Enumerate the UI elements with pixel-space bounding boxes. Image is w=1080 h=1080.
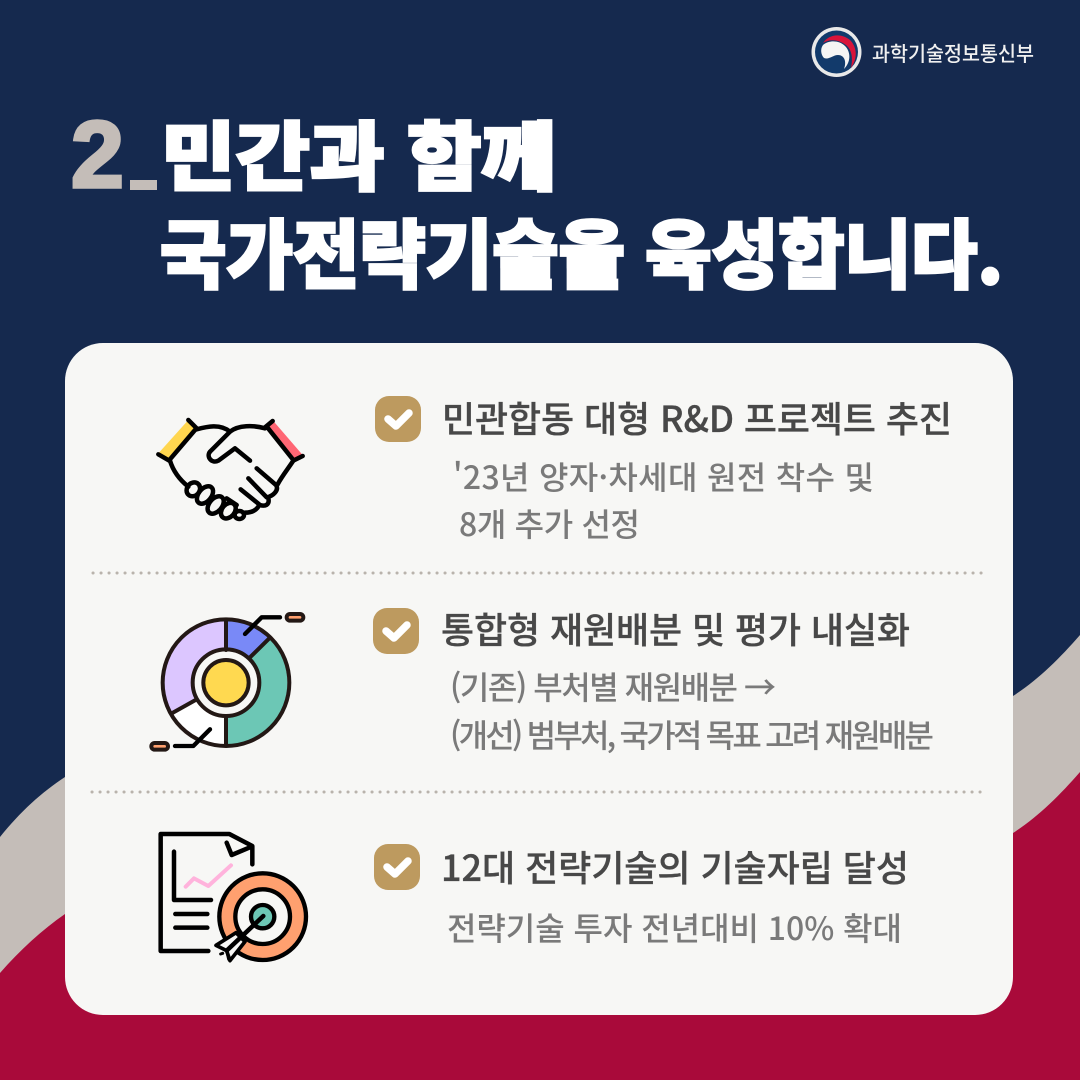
title number: 2 xyxy=(71,102,124,208)
sub text 2: (개선) 범부처, 국가적 목표 고려 재원배분 xyxy=(450,711,934,757)
sub text 2 xyxy=(450,663,934,757)
title number xyxy=(71,102,157,208)
icon: handshake xyxy=(158,420,303,521)
ministry name: 과학기술정보통신부 xyxy=(872,37,1034,67)
sub text 3: 전략기술 투자 전년대비 10% 확대 xyxy=(447,904,902,950)
ministry logo xyxy=(812,27,862,77)
heading 2: 통합형 재원배분 및 평가 내실화 xyxy=(441,602,910,654)
title xyxy=(160,97,1003,304)
background gray wave xyxy=(0,635,1080,1080)
check badge 2 xyxy=(373,608,419,654)
sub text 1: '23년 양자·차세대 원전 착수 및 xyxy=(453,453,874,499)
background red wave xyxy=(0,772,1080,1080)
title: 민간과 함께 xyxy=(161,97,556,206)
title: 국가전략기술을 육성합니다. xyxy=(160,195,1003,304)
heading 1: 민관합동 대형 R&D 프로젝트 추진 xyxy=(442,391,952,443)
panel xyxy=(65,343,1013,1015)
heading 3: 12대 전략기술의 기술자립 달성 xyxy=(441,840,909,892)
icon: donut chart xyxy=(151,614,303,750)
check badge 1 xyxy=(375,396,421,442)
sub text 2: (기존) 부처별 재원배분 → xyxy=(450,663,776,709)
sub text 1: 8개 추가 선정 xyxy=(459,500,640,546)
sub text 1 xyxy=(453,453,874,546)
check badge 3 xyxy=(374,844,420,890)
icon: document with target xyxy=(161,834,306,961)
